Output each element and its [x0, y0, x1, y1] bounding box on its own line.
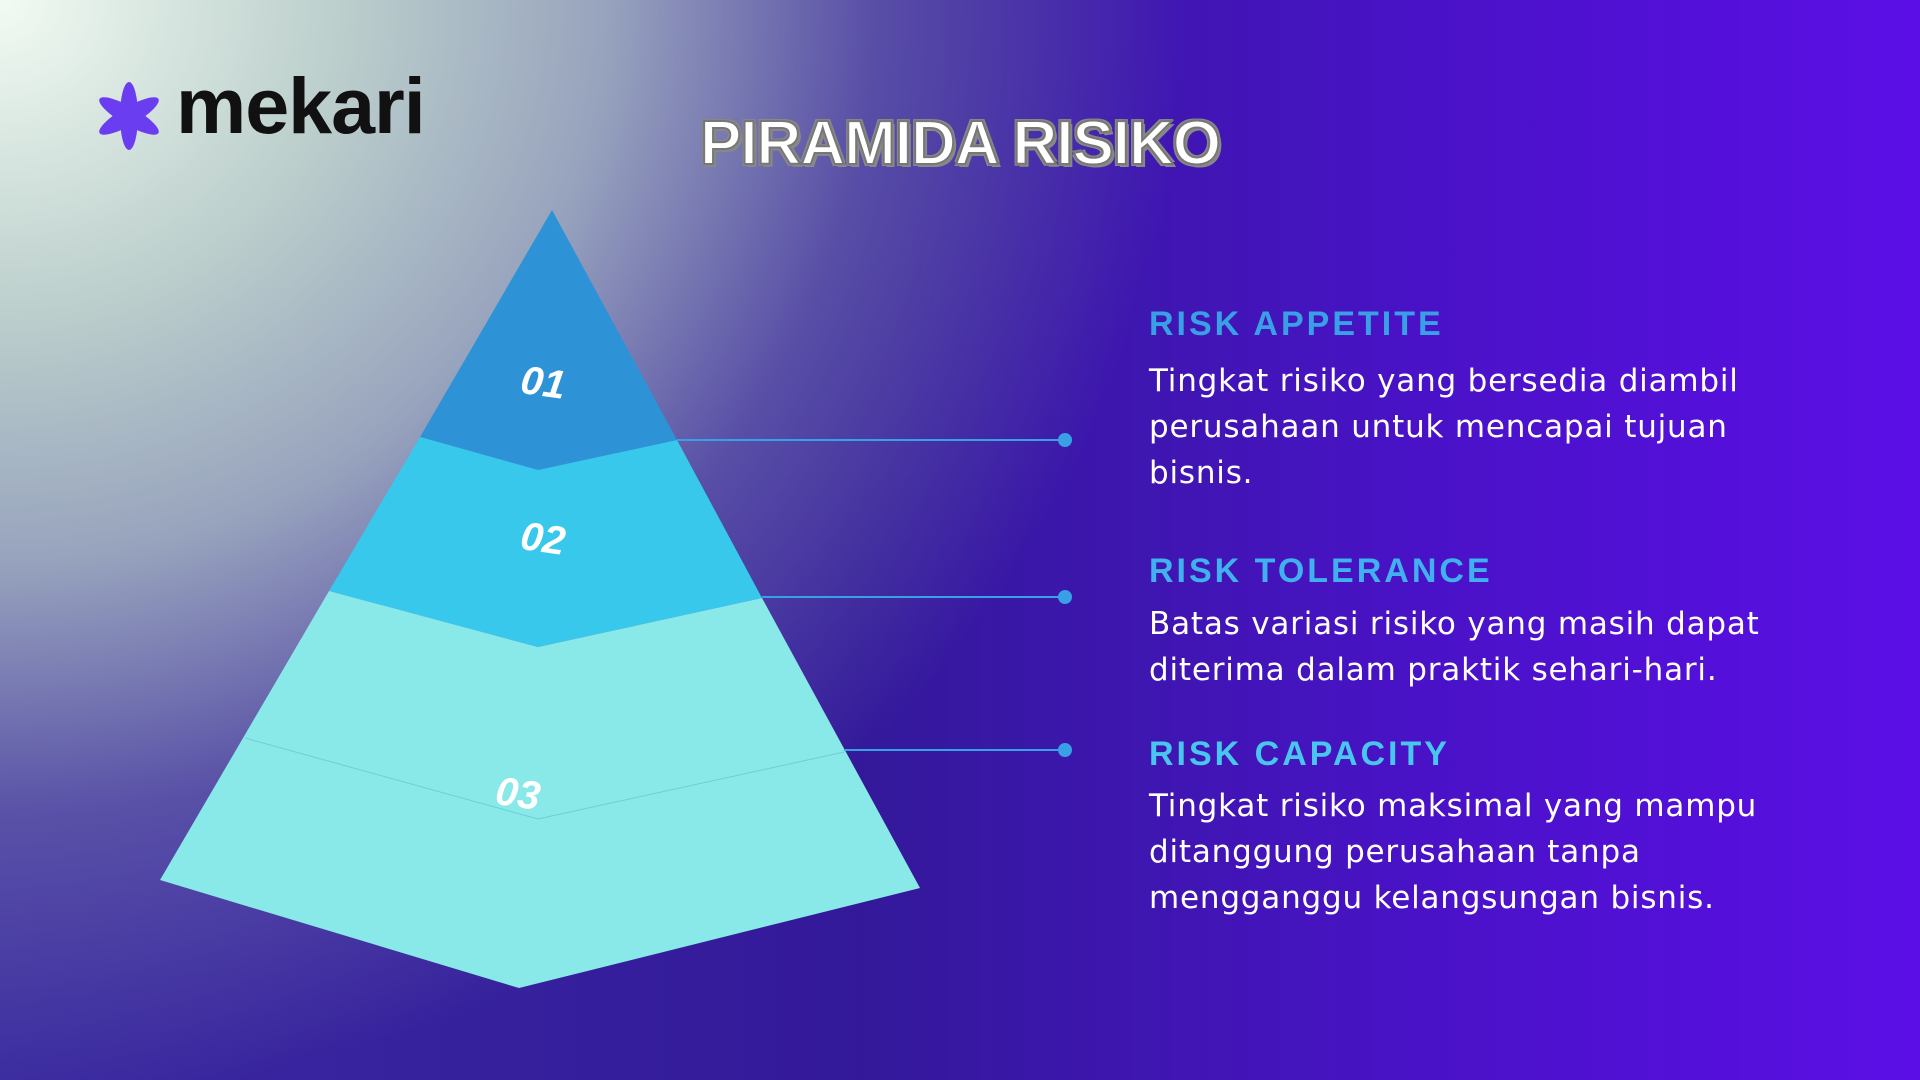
label 01: 01	[518, 358, 568, 408]
text: risk appetite: Tingkat risiko yang bersedia diambil	[1149, 363, 1739, 399]
connector lines	[677, 434, 1071, 756]
text: risk capacity: ditanggung perusahaan tanpa	[1149, 834, 1641, 870]
label 03: 03	[493, 769, 543, 819]
heading: risk appetite: RISK APPETITE	[1149, 305, 1444, 343]
text: risk capacity: Tingkat risiko maksimal yang mampu	[1149, 788, 1757, 824]
text: risk capacity: mengganggu kelangsungan bisnis.	[1149, 880, 1715, 916]
text: risk capacity	[1148, 788, 1757, 916]
text: risk appetite: bisnis.	[1149, 455, 1253, 491]
heading: risk tolerance: RISK TOLERANCE	[1149, 552, 1493, 590]
title: PIRAMIDA RISIKO	[700, 109, 1220, 178]
text: risk appetite	[1148, 363, 1739, 491]
text: risk appetite: perusahaan untuk mencapai tujuan	[1149, 409, 1728, 445]
label 02: 02	[518, 514, 568, 564]
icon: star	[95, 82, 163, 150]
text: risk tolerance: Batas variasi risiko yang masih dapat	[1149, 606, 1760, 642]
text: risk tolerance	[1149, 606, 1760, 688]
text: risk tolerance: diterima dalam praktik sehari-hari.	[1149, 652, 1717, 688]
logo: mekari: mekari	[176, 61, 425, 150]
heading: risk capacity: RISK CAPACITY	[1149, 735, 1450, 773]
